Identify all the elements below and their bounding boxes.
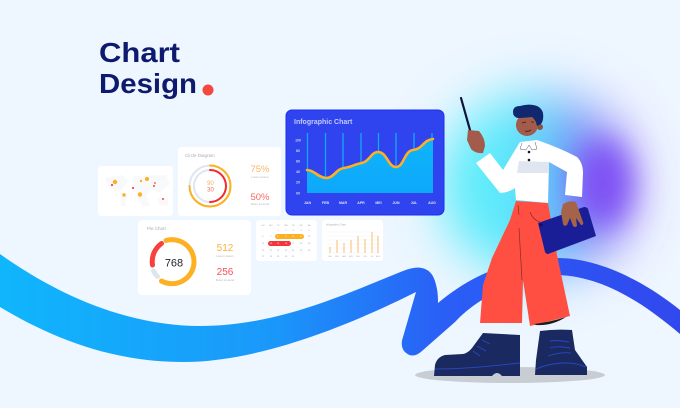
collar and buttons xyxy=(520,142,537,161)
calendar dates: 29 xyxy=(277,256,280,258)
area fill xyxy=(307,139,433,193)
panel: world map xyxy=(98,166,173,216)
calendar dates: 13 xyxy=(262,243,265,245)
map landmasses xyxy=(105,175,170,206)
month labels: MAR xyxy=(339,201,347,205)
stat 75%: Lorem ipsum xyxy=(251,175,269,179)
stat 256: Dolor sit amet xyxy=(216,278,234,282)
bar chart heading: Infographic Chart xyxy=(326,222,346,226)
calendar dates: 16 xyxy=(285,243,288,245)
calendar dates: 25 xyxy=(300,250,303,252)
bar labels: MEI xyxy=(356,256,360,258)
stat 256 xyxy=(216,267,234,282)
calendar dates: 5 xyxy=(308,230,310,232)
panel: circle diagram xyxy=(178,147,281,216)
calendar highlight orange xyxy=(275,234,304,239)
pie chart heading: Pie Chart xyxy=(147,226,167,231)
calendar dates: 8 xyxy=(277,236,279,238)
title: Design xyxy=(99,68,197,99)
vertical gridlines xyxy=(308,133,432,178)
ring values xyxy=(207,181,214,194)
calendar dates: TU xyxy=(277,225,280,227)
month labels: MEI xyxy=(375,201,382,205)
bar labels: JAN xyxy=(328,255,332,258)
month labels: APR xyxy=(357,201,365,205)
calendar dates: FR xyxy=(300,225,303,227)
shirt band xyxy=(517,161,549,173)
calendar dates xyxy=(261,224,311,258)
calendar dates: 28 xyxy=(270,256,273,258)
bar labels: FEB xyxy=(335,256,340,258)
calendar dates: 22 xyxy=(277,250,280,252)
bar labels: MAR xyxy=(342,255,347,258)
concentric rings xyxy=(190,166,230,206)
calendar dates: 17 xyxy=(292,243,295,245)
calendar dates: TH xyxy=(292,225,295,227)
panel: infographic chart xyxy=(286,110,444,215)
calendar dates: 31 xyxy=(292,256,295,258)
calendar dates: 6 xyxy=(262,236,264,238)
shadow xyxy=(415,367,605,383)
stat 50%: 50% xyxy=(250,192,270,203)
bar labels: JUL xyxy=(370,256,374,258)
calendar dates: 3 xyxy=(292,230,294,232)
bar labels: JUN xyxy=(363,256,367,258)
month labels: FEB xyxy=(322,201,329,205)
map markers xyxy=(111,177,164,200)
head xyxy=(513,105,543,136)
panel: small bar chart xyxy=(322,220,383,261)
y axis labels: 80 xyxy=(296,149,300,153)
calendar dates: 20 xyxy=(262,250,265,252)
title xyxy=(99,37,214,99)
month labels xyxy=(304,201,436,205)
calendar dates: 4 xyxy=(300,230,302,232)
calendar dates: SU xyxy=(261,225,265,227)
stat 75%: 75% xyxy=(250,164,270,175)
donut value: 768 xyxy=(165,258,183,270)
pants cuff opening xyxy=(534,317,566,325)
panel: pie chart xyxy=(138,220,251,295)
pants xyxy=(480,201,570,326)
stat 256: 256 xyxy=(217,267,234,278)
tablet camera xyxy=(540,224,542,226)
calendar dates: 21 xyxy=(270,250,273,252)
ring values: 90 xyxy=(207,181,214,187)
month labels: JAN xyxy=(304,201,311,205)
calendar dates: 26 xyxy=(308,250,311,252)
donut chart xyxy=(152,240,194,284)
calendar dates: 11 xyxy=(300,236,303,238)
y axis labels xyxy=(295,138,301,196)
calendar dates: 15 xyxy=(277,243,280,245)
stat 512: 512 xyxy=(217,243,234,254)
month labels: JUL xyxy=(411,201,418,205)
calendar dates: MO xyxy=(269,225,273,227)
calendar dates: 7 xyxy=(270,236,272,238)
calendar dates: SA xyxy=(308,224,311,227)
tablet xyxy=(538,207,596,254)
calendar dates: WE xyxy=(284,225,288,227)
title: Chart xyxy=(99,37,180,68)
bar chart gridlines xyxy=(327,232,381,253)
calendar dates: 2 xyxy=(285,230,287,232)
calendar dates: 1 xyxy=(277,230,279,232)
blue ribbon swoosh xyxy=(0,254,680,362)
stat 512: Lorem ipsum xyxy=(216,254,234,258)
left boot xyxy=(434,333,520,376)
bar labels: APR xyxy=(349,255,354,258)
bar labels xyxy=(328,255,381,258)
circle diagram heading: Circle Diagram xyxy=(185,153,215,158)
title dot xyxy=(202,84,214,96)
calendar dates: 10 xyxy=(292,236,295,238)
bars xyxy=(330,232,378,253)
month labels: AUG xyxy=(428,201,436,205)
hand on tablet xyxy=(561,201,583,227)
calendar dates: 19 xyxy=(308,243,311,245)
panel: calendar xyxy=(256,220,317,261)
raised hand xyxy=(467,130,485,153)
y axis labels: 60 xyxy=(296,160,300,164)
pants details xyxy=(518,205,540,280)
stat 512 xyxy=(216,243,234,258)
pointer xyxy=(461,98,470,130)
right boot xyxy=(535,330,587,375)
calendar dates: 24 xyxy=(292,250,295,252)
stat 50%: Dolor sit amet xyxy=(251,202,269,206)
y axis labels: 20 xyxy=(296,180,300,184)
ring values: 30 xyxy=(207,188,214,194)
calendar dates: 18 xyxy=(300,243,303,245)
orange line xyxy=(307,139,433,178)
bar labels: AUG xyxy=(376,255,381,258)
figure: presenter xyxy=(415,98,605,383)
calendar dates: 14 xyxy=(270,243,273,245)
background glow xyxy=(440,93,630,277)
calendar dates: 9 xyxy=(285,236,287,238)
calendar dates: 23 xyxy=(285,250,288,252)
y axis labels: 00 xyxy=(296,192,300,196)
y axis labels: 40 xyxy=(296,170,300,174)
calendar dates: 30 xyxy=(285,256,288,258)
infographic chart heading: Infographic Chart xyxy=(294,119,353,126)
calendar dates: 12 xyxy=(308,236,311,238)
y axis labels: 100 xyxy=(295,138,301,142)
calendar highlight red xyxy=(268,241,291,246)
calendar dates: 27 xyxy=(262,256,265,258)
month labels: JUN xyxy=(392,201,400,205)
shirt xyxy=(476,140,583,203)
